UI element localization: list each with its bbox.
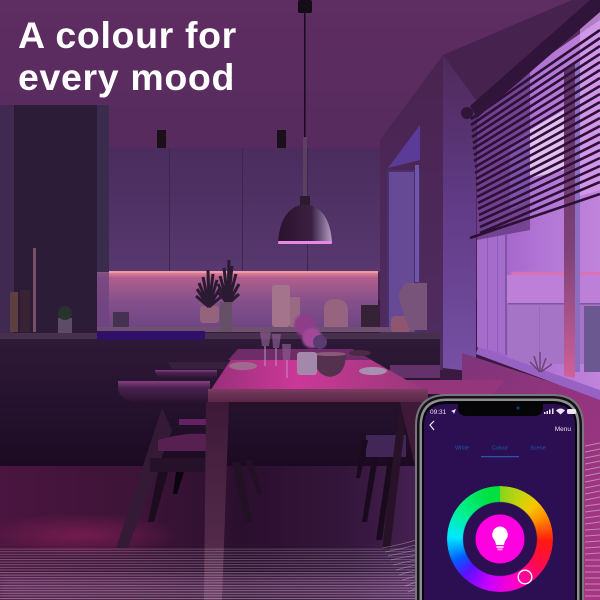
window glass and frame <box>477 5 600 392</box>
curved stripes left of phone <box>382 540 416 592</box>
tab labels: Colour <box>492 446 508 452</box>
upper wall above the blind <box>443 0 600 130</box>
lower glow <box>0 575 430 600</box>
tab labels <box>455 446 546 452</box>
counter objects <box>113 260 427 332</box>
phone mockup <box>415 394 584 600</box>
notch <box>458 403 543 416</box>
title <box>18 14 237 98</box>
chairs right <box>356 365 505 550</box>
title: every mood <box>18 56 235 98</box>
shelf items left <box>10 248 72 333</box>
kitchen backsplash with LED strip <box>97 271 378 332</box>
blind headrail <box>461 0 600 119</box>
tab labels: White <box>455 446 469 452</box>
window blinds <box>470 30 600 238</box>
stripes right of phone <box>585 443 600 596</box>
back chevron <box>430 421 434 430</box>
colour wheel <box>447 486 553 592</box>
dining table <box>204 349 428 600</box>
floor <box>0 466 440 600</box>
table setting <box>229 314 387 378</box>
centre bulb button <box>476 514 532 584</box>
phone body and screen <box>415 394 584 600</box>
small plant on the sill <box>530 352 552 372</box>
status time: 09:31 <box>430 409 447 416</box>
right wall pier <box>443 55 476 372</box>
window sill <box>420 353 600 600</box>
title: A colour for <box>18 14 237 56</box>
tab labels: Scene <box>530 446 546 452</box>
ceiling spotlights <box>157 130 286 148</box>
countertop <box>0 327 440 339</box>
side wall alcove <box>380 55 443 370</box>
chairs left <box>116 362 262 548</box>
bottom striped overlay <box>0 548 430 600</box>
lower cabinets <box>0 339 440 467</box>
dark column <box>14 105 97 335</box>
pendant lamp <box>278 0 332 244</box>
left wall <box>0 105 14 337</box>
menu label: Menu <box>555 426 571 433</box>
upper kitchen cabinets <box>108 148 380 272</box>
active tab underline <box>481 456 519 457</box>
ceiling <box>0 0 600 300</box>
purple counter reflection <box>97 331 205 340</box>
status icons <box>544 408 576 414</box>
